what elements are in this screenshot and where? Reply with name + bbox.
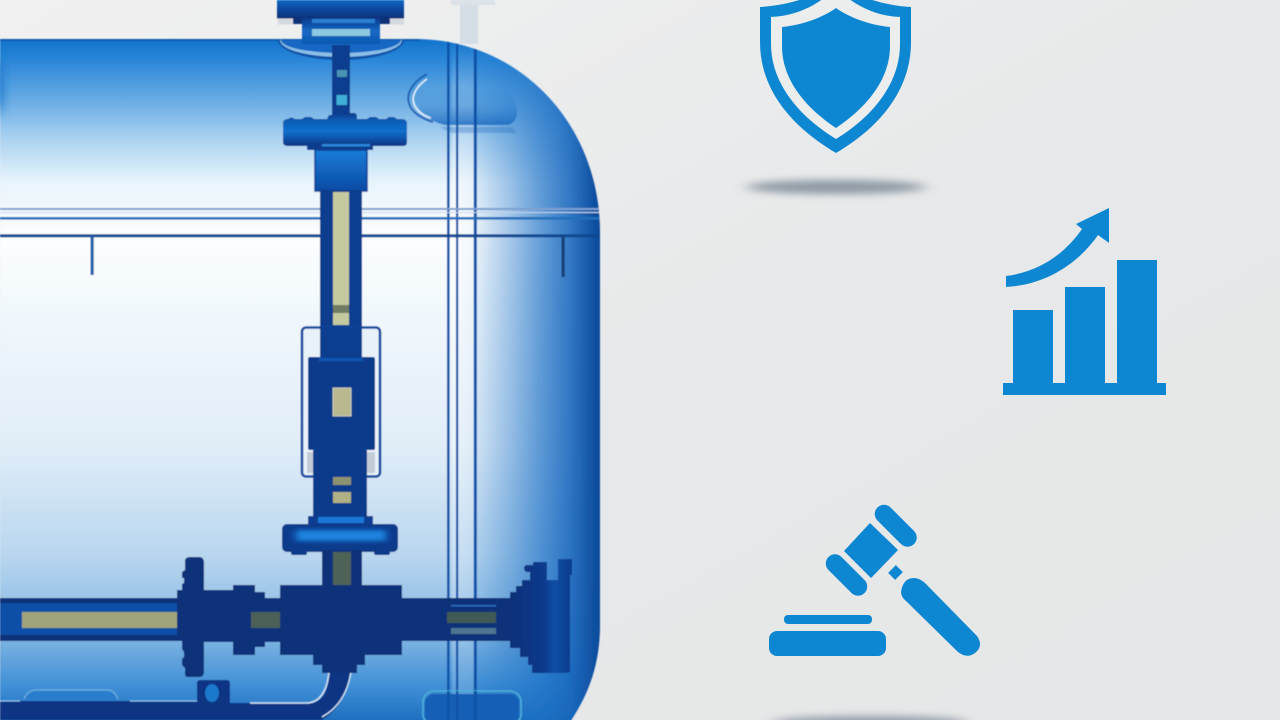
long stem with sight glass [320,190,362,360]
gavel shadow [772,716,968,720]
icon: gavel [769,514,980,656]
lower flange [282,516,398,592]
tank body [0,39,610,720]
valve casing [302,327,380,518]
upper stem [332,45,350,118]
shield shadow [746,180,926,194]
lower tank details [0,672,521,720]
main horizontal pipe [0,557,572,677]
top flange [277,0,404,60]
icon: rising bar chart [1003,208,1166,395]
vertical rails [447,40,477,720]
upper flange [283,113,407,150]
actuator block [315,150,367,191]
right stepped flange [510,559,572,673]
horizontal rails [0,208,600,277]
pressure vessel illustration [0,0,610,720]
left flange [177,557,402,677]
faint vent pipe [451,0,495,44]
internal dome [408,74,517,133]
icon: shield [760,0,911,153]
light vertical band [452,39,475,720]
